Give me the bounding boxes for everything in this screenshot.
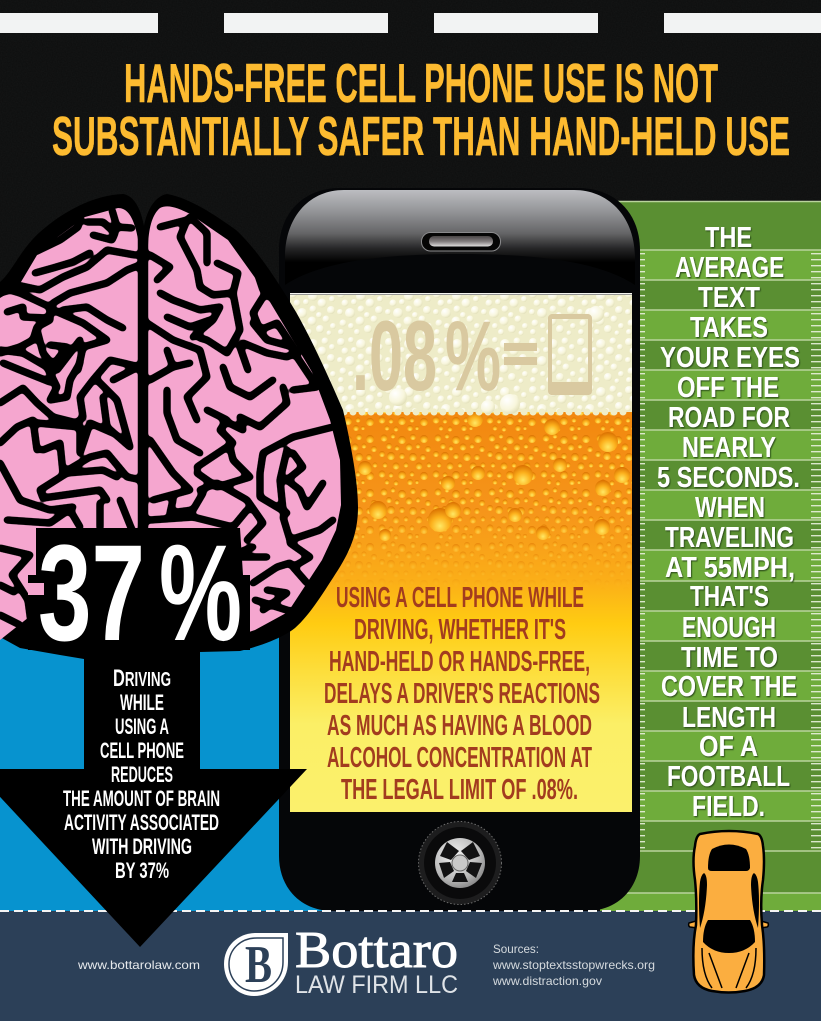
body text on beer (324, 582, 600, 806)
football field text: ROAD FOR (668, 402, 790, 434)
beer liquid (290, 411, 632, 812)
blue panel (0, 620, 340, 911)
phone body (279, 188, 640, 911)
phone speaker (422, 232, 500, 251)
arrow text: USING A (115, 714, 169, 739)
arrow text: ACTIVITY ASSOCIATED (64, 810, 219, 835)
dashed road edge (0, 910, 821, 912)
phone (279, 188, 640, 911)
rear window (708, 844, 750, 871)
left hemisphere (0, 208, 139, 640)
arrow text: DRIVING (113, 665, 171, 692)
phone screen beer (290, 293, 632, 812)
arrow text: REDUCES (111, 762, 173, 787)
arrow text: WHILE (120, 690, 164, 715)
logo subtitle: LAW FIRM LLC (295, 971, 458, 999)
body text on beer: DELAYS A DRIVER'S REACTIONS (324, 678, 600, 710)
arrow and 37% plate (0, 517, 307, 947)
football field text: OF A (699, 731, 758, 763)
logo name: Bottaro (295, 922, 458, 979)
football field text: ENOUGH (682, 612, 776, 644)
hood lines (702, 948, 756, 988)
road lane dashes (0, 13, 821, 33)
arrow text (63, 665, 220, 883)
icon: wheel home button (418, 822, 502, 904)
equation: .08% equals phone: % (445, 300, 501, 411)
football field text: TEXT (698, 282, 760, 314)
body text on beer: USING A CELL PHONE WHILE (336, 582, 584, 614)
equation: .08% equals phone (352, 300, 592, 411)
football field text: FIELD. (692, 791, 765, 823)
arrow text: BY 37% (115, 858, 169, 883)
logo (224, 922, 458, 999)
football field text: OFF THE (677, 372, 779, 404)
logo shield (224, 933, 288, 996)
body text on beer: AS MUCH AS HAVING A BLOOD (327, 710, 592, 742)
body text on beer: THE LEGAL LIMIT OF .08%. (341, 774, 578, 806)
side windows (699, 873, 759, 928)
arrow text: CELL PHONE (100, 738, 184, 763)
37% figure: % (159, 517, 242, 670)
car body (693, 831, 764, 992)
title (52, 52, 790, 167)
equation: .08% equals phone: .08 (352, 300, 437, 411)
football field text: FOOTBALL (667, 761, 790, 793)
beer foam (290, 295, 632, 414)
footer band (0, 911, 821, 1021)
logo shield: B (245, 936, 272, 994)
football field text: THE (705, 222, 752, 254)
body text on beer: HAND-HELD OR HANDS-FREE, (329, 646, 590, 678)
panel: football field (600, 201, 821, 911)
brain (0, 194, 358, 659)
football field text: WHEN (695, 492, 765, 524)
phone gloss (285, 190, 635, 285)
37% figure: 37 (38, 517, 145, 670)
football field text: LENGTH (682, 702, 776, 734)
car mirrors (689, 921, 768, 928)
football field text (657, 222, 800, 823)
arrow shape (0, 640, 307, 947)
arrow text: THE AMOUNT OF BRAIN (63, 786, 220, 811)
body text on beer: ALCOHOL CONCENTRATION AT (327, 742, 592, 774)
brain folds (0, 210, 333, 630)
sources: Sources: (493, 942, 539, 956)
football field text: AT 55MPH, (665, 552, 795, 584)
pink brain sliver (28, 583, 44, 595)
brain silhouette (0, 194, 358, 659)
body text on beer: DRIVING, WHETHER IT'S (354, 614, 566, 646)
football field text: THAT'S (690, 581, 769, 613)
website url: www.bottarolaw.com (77, 958, 200, 972)
windshield (703, 920, 755, 953)
sources: www.distraction.gov (492, 974, 602, 988)
football field text: TAKES (690, 312, 768, 344)
football field text: TIME TO (681, 642, 778, 674)
football field text: NEARLY (682, 432, 776, 464)
plate behind 37% (28, 528, 250, 650)
sources (492, 942, 655, 988)
arrow text: WITH DRIVING (92, 834, 192, 859)
right hemisphere (148, 206, 341, 640)
icon: orange car (689, 831, 768, 992)
football field text: AVERAGE (675, 252, 784, 284)
sources: www.stoptextsstopwrecks.org (492, 958, 655, 972)
